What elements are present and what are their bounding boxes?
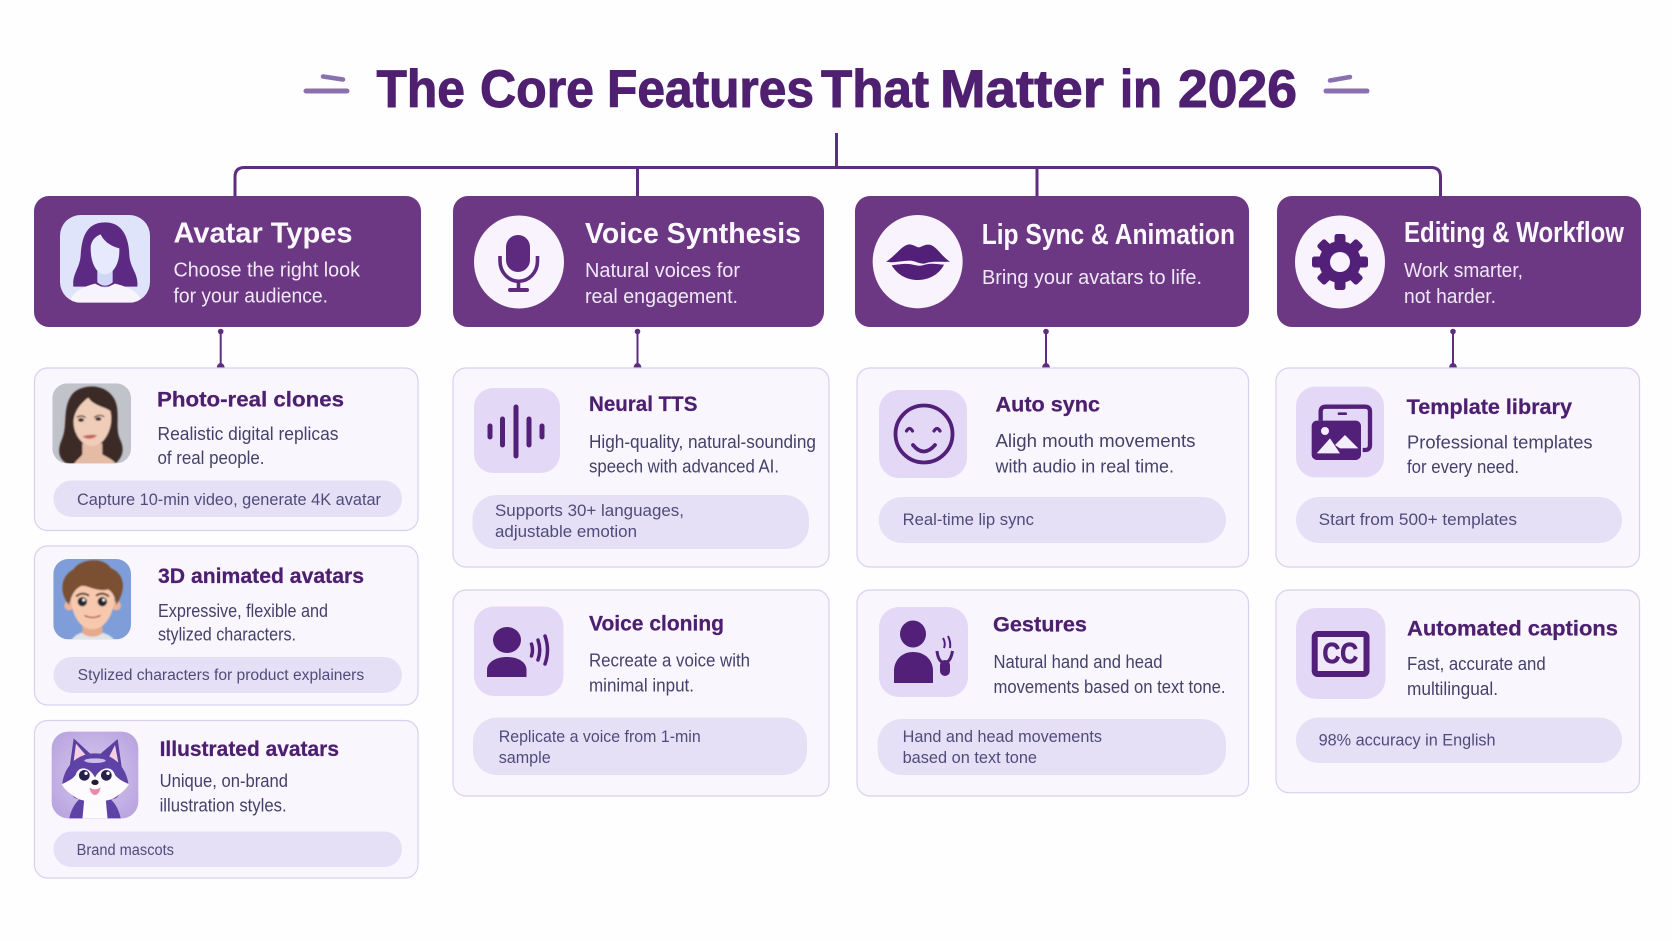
pill note: 98% accuracy in English	[1319, 732, 1496, 750]
pill note: Brand mascots	[77, 842, 174, 859]
card description: Fast, accurate and	[1407, 653, 1546, 674]
heading: Editing & Workflow	[1404, 217, 1625, 249]
panel: Editing & Workflow column	[1276, 196, 1641, 793]
card description	[589, 431, 816, 477]
card description	[1407, 432, 1593, 477]
icon: person gesturing	[879, 607, 968, 697]
card description: for every need.	[1407, 456, 1519, 477]
description: for your audience.	[174, 286, 328, 308]
title accent right	[1326, 77, 1367, 91]
icon: microphone	[474, 216, 564, 308]
connector tree from title to the four column headers	[235, 133, 1440, 196]
icon: closed captions: CC	[1322, 638, 1358, 670]
pill note: adjustable emotion	[495, 523, 637, 541]
pill note	[472, 495, 809, 549]
card description: Realistic digital replicas	[158, 423, 338, 444]
title accent left	[306, 76, 347, 91]
panel: Lip Sync & Animation column	[855, 196, 1249, 796]
title text: 2026	[1178, 60, 1297, 119]
description: Bring your avatars to life.	[982, 267, 1202, 289]
card: Automated captions	[1276, 590, 1640, 793]
card description	[589, 650, 750, 696]
card title: Gestures	[993, 613, 1087, 637]
card description: multilingual.	[1407, 678, 1498, 699]
icon: gear	[1295, 216, 1385, 308]
card title: Neural TTS	[589, 392, 697, 416]
title text: That	[821, 60, 929, 119]
pill note: Stylized characters for product explainers	[78, 667, 364, 684]
card description	[1407, 653, 1546, 699]
card: Neural TTS	[453, 368, 829, 567]
title	[306, 60, 1367, 119]
card title: 3D animated avatars	[158, 564, 364, 588]
description	[1404, 260, 1523, 308]
card description: Expressive, flexible and	[158, 600, 328, 621]
icon: sound waveform	[474, 388, 560, 473]
card title: Auto sync	[996, 393, 1100, 417]
icon: smiling face	[879, 390, 967, 478]
connector: header to cards	[1042, 329, 1050, 368]
connector: header to cards	[1449, 329, 1457, 368]
card description: stylized characters.	[158, 624, 296, 645]
card description	[160, 770, 288, 816]
card: Auto sync	[857, 368, 1248, 567]
card description: speech with advanced AI.	[589, 456, 779, 477]
pill note	[54, 832, 402, 867]
icon: speaking person	[474, 606, 564, 696]
card: Voice cloning	[453, 590, 829, 796]
connector: header to cards	[634, 329, 642, 368]
title text: in	[1120, 60, 1162, 119]
description: Natural voices for	[585, 260, 740, 282]
image: purple fox mascot	[52, 732, 138, 820]
pill note: Real-time lip sync	[903, 511, 1034, 529]
title text: Features	[607, 60, 814, 119]
card description: Professional templates	[1407, 432, 1593, 453]
card: 3D animated avatars	[34, 546, 418, 705]
description: not harder.	[1404, 286, 1496, 308]
header: Lip Sync & Animation	[855, 196, 1249, 327]
header: Voice Synthesis	[453, 196, 824, 327]
card description: movements based on text tone.	[994, 676, 1226, 697]
card description	[994, 651, 1226, 697]
description	[174, 260, 361, 308]
card description: minimal input.	[589, 675, 694, 696]
title text: Core	[480, 60, 594, 119]
card description	[158, 600, 328, 645]
heading: Voice Synthesis	[585, 218, 801, 250]
card description: Recreate a voice with	[589, 650, 750, 671]
icon: image templates	[1296, 387, 1384, 477]
card description	[995, 430, 1196, 477]
panel: Avatar Types column	[34, 196, 421, 878]
card description	[158, 423, 338, 468]
title text: The	[376, 60, 465, 119]
pill note	[1296, 497, 1622, 543]
card title: Template library	[1407, 395, 1572, 419]
pill note: Start from 500+ templates	[1319, 511, 1517, 529]
pill note: Hand and head movements	[903, 728, 1102, 746]
card description: Aligh mouth movements	[996, 430, 1196, 451]
pill note	[54, 480, 402, 517]
header: Editing & Workflow	[1277, 196, 1641, 327]
pill note	[879, 497, 1226, 543]
card: Illustrated avatars	[34, 720, 418, 878]
card description: illustration styles.	[160, 795, 287, 816]
pill note	[878, 719, 1226, 775]
description	[585, 260, 740, 308]
card: Template library	[1276, 368, 1640, 567]
pill note: Supports 30+ languages,	[495, 502, 684, 520]
image: photo-real portrait	[52, 383, 131, 464]
connector: header to cards	[217, 329, 225, 368]
card title: Photo-real clones	[157, 388, 344, 412]
pill note	[1296, 718, 1622, 763]
pill note	[473, 718, 807, 775]
card description: of real people.	[158, 447, 264, 468]
icon: lips	[873, 215, 963, 308]
card: Gestures	[857, 590, 1248, 796]
pill note	[54, 657, 402, 693]
description: real engagement.	[585, 286, 738, 308]
heading: Lip Sync & Animation	[982, 219, 1235, 251]
description: Work smarter,	[1404, 260, 1523, 282]
pill note: Capture 10-min video, generate 4K avatar	[77, 491, 381, 509]
card description: Natural hand and head	[994, 651, 1162, 672]
card title: Voice cloning	[589, 612, 724, 636]
icon: woman avatar silhouette	[60, 215, 150, 303]
card description: Unique, on-brand	[160, 770, 288, 791]
panel: Voice Synthesis column	[453, 196, 829, 796]
icon: closed captions	[1296, 608, 1386, 699]
card description: with audio in real time.	[995, 456, 1174, 477]
card title: Illustrated avatars	[160, 737, 339, 761]
pill note: sample	[499, 749, 551, 767]
card description: High-quality, natural-sounding	[589, 431, 816, 452]
card title: Automated captions	[1407, 617, 1618, 641]
image: 3D cartoon boy	[53, 559, 131, 641]
description: Choose the right look	[174, 260, 361, 282]
heading: Avatar Types	[174, 218, 352, 250]
pill note: based on text tone	[903, 749, 1037, 767]
card: Photo-real clones	[34, 368, 418, 530]
title text: Matter	[940, 60, 1104, 119]
pill note: Replicate a voice from 1-min	[499, 728, 701, 746]
header: Avatar Types	[34, 196, 421, 327]
